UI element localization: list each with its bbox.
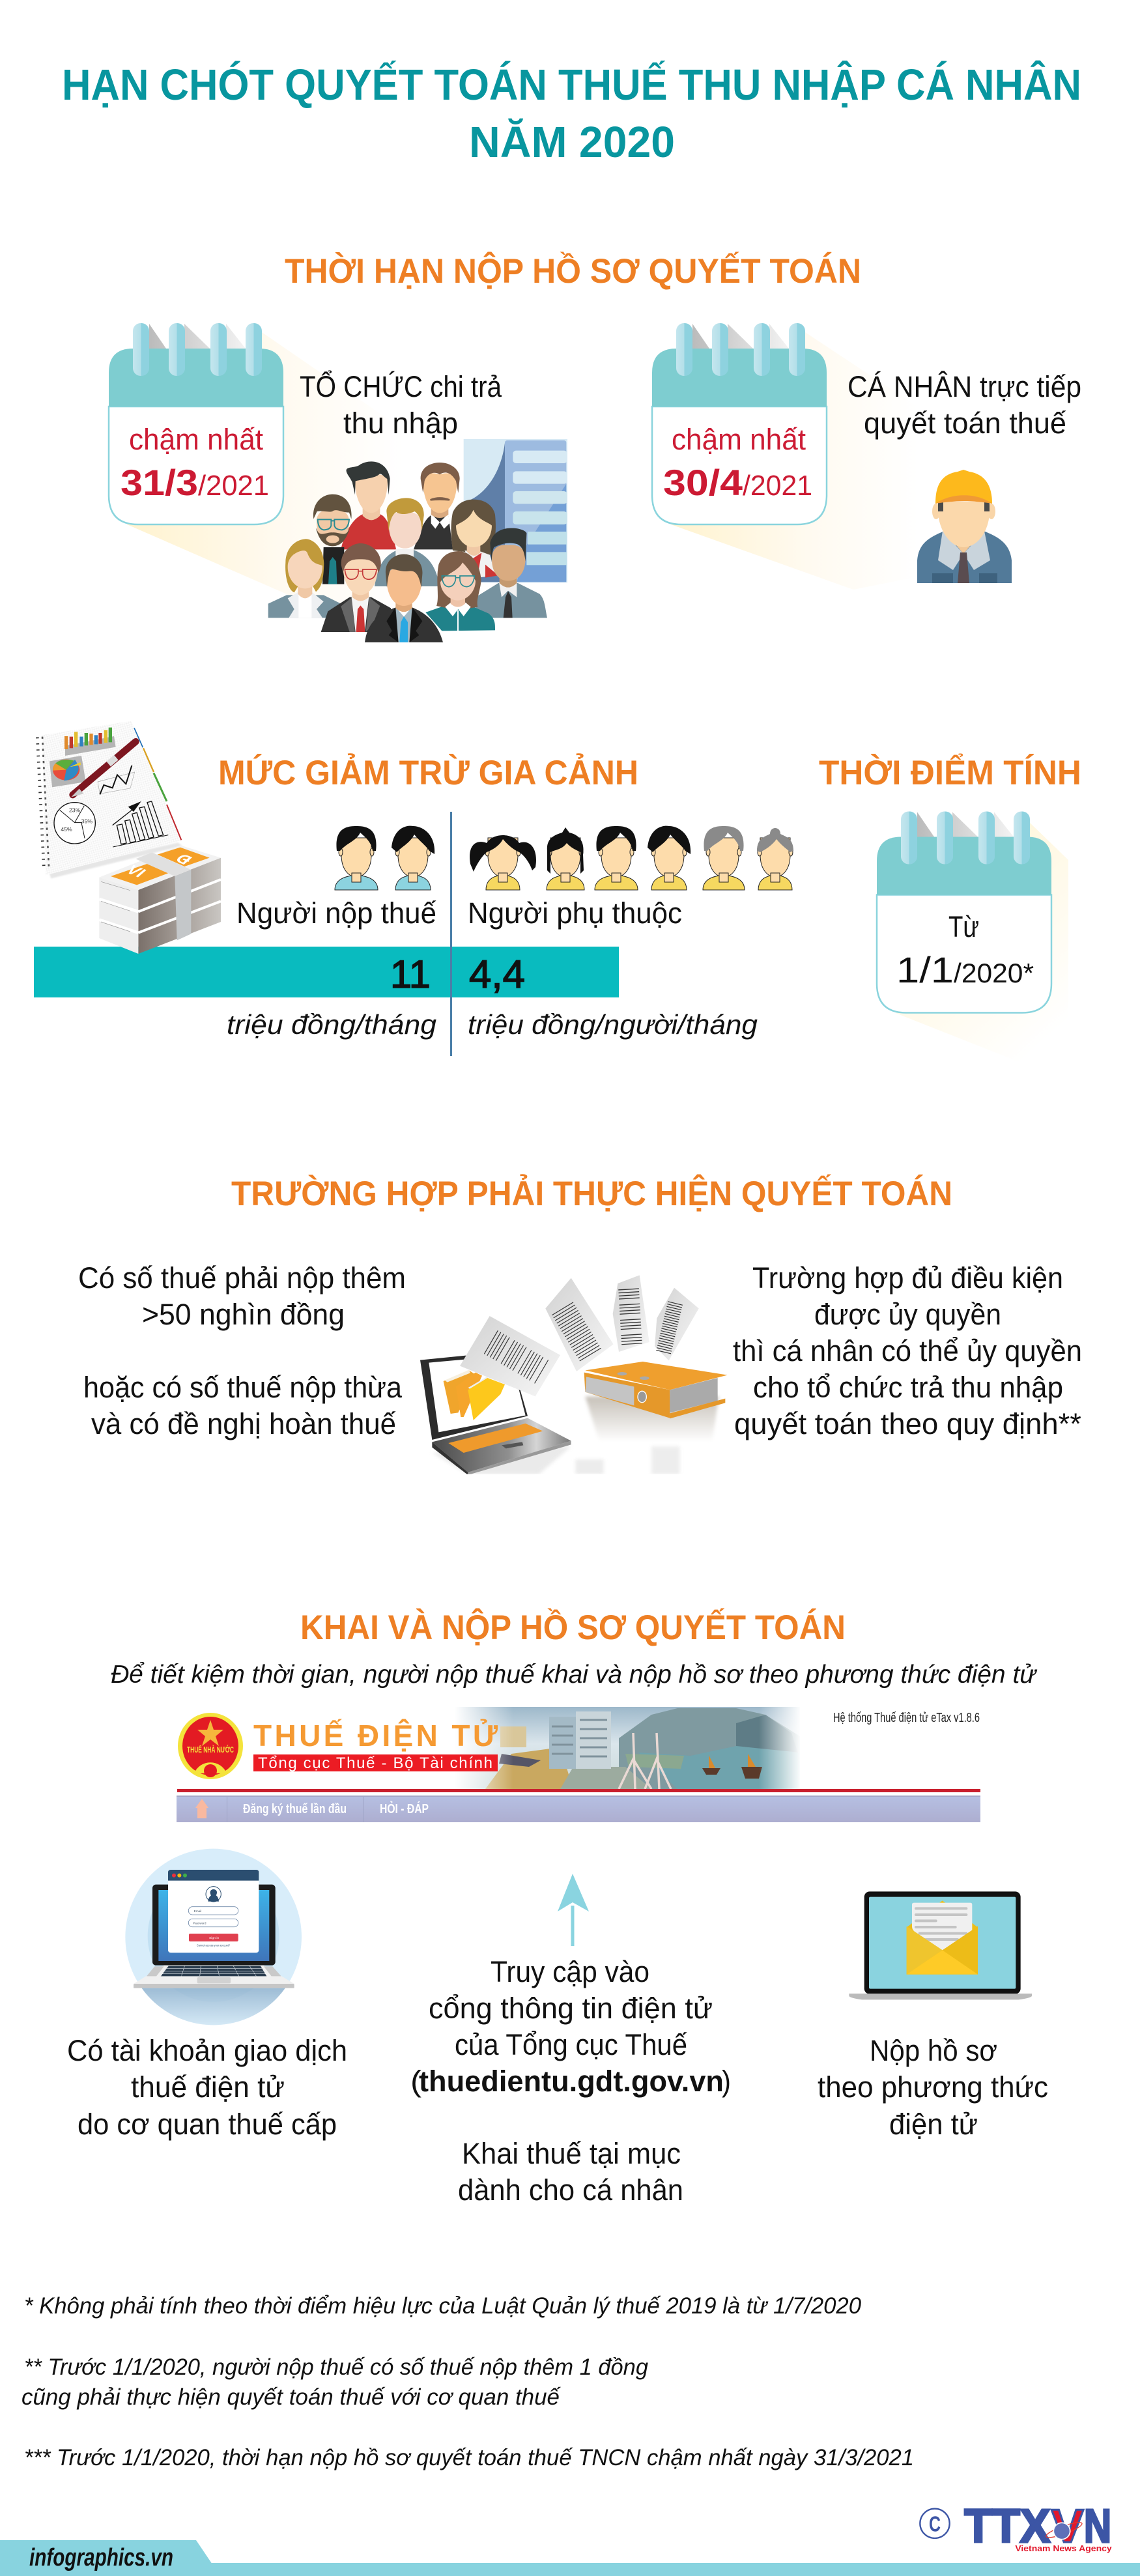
calendar: individuals deadline: chậm nhất <box>672 423 806 456</box>
text: dependent deduction: triệu đồng/người/tháng <box>468 1009 758 1040</box>
calendar: individuals deadline <box>652 323 827 524</box>
person: tan man <box>476 528 547 618</box>
subtitle: Để tiết kiệm thời gian, người nộp thuế khai và nộp hồ sơ theo phương thức điện tử <box>111 1661 1037 1689</box>
icon: laptop with envelope <box>849 1891 1032 1999</box>
text: step middle: Khai thuế tại mục <box>462 2137 681 2170</box>
calendar: effective date <box>877 812 1051 1012</box>
text: dependent deduction: 4,4 <box>469 952 525 996</box>
footnotes: * Không phải tính theo thời điểm hiệu lực của Luật Quản lý thuế 2019 là từ 1/7/2020 <box>24 2293 862 2319</box>
text block: left conditions: Có số thuế phải nộp thêm <box>78 1261 406 1295</box>
text: step right <box>818 2034 1048 2141</box>
calendar shadow: effective date <box>896 822 1068 1081</box>
icon: laptop login: Cannot access your account? <box>197 1944 230 1947</box>
text: step middle: ) <box>722 2065 731 2098</box>
calendar shadow: organisations <box>127 332 404 629</box>
person: blond woman <box>268 539 341 618</box>
illustration: notebook with charts: 23% <box>69 807 81 814</box>
red line <box>177 1789 980 1792</box>
person: moustache <box>414 463 460 549</box>
bar: deduction amounts <box>34 947 619 997</box>
logo: TTXVN: C <box>929 2512 941 2536</box>
text: step right: Nộp hồ sơ <box>870 2034 997 2067</box>
text block: right conditions: Trường hợp đủ điều kiện <box>752 1261 1063 1295</box>
footer band <box>0 2540 1140 2576</box>
illustration: notebook with charts <box>37 721 182 878</box>
illustration: notebook with charts: 45% <box>61 826 72 833</box>
calendar: effective date: 1/1 <box>896 949 954 990</box>
arrow up <box>558 1874 589 1946</box>
logo: TTXVN: TTX <box>964 2500 1050 2553</box>
text: taxpayer deduction: Người nộp thuế <box>236 896 436 930</box>
text: step middle: dành cho cá nhân <box>458 2173 683 2207</box>
text: step left: Có tài khoản giao dịch <box>67 2034 347 2067</box>
heading: thời điểm tính: THỜI ĐIỂM TÍNH <box>819 753 1081 792</box>
text: taxpayer deduction: 11 <box>390 952 431 996</box>
illustration: money stack: Đ <box>172 851 196 866</box>
calendar: organisations deadline: 31/3 <box>121 462 198 503</box>
illustration: money stack <box>99 845 221 954</box>
person: red glasses <box>321 543 391 632</box>
text: dependent deduction <box>468 896 758 1040</box>
text: individuals: CÁ NHÂN trực tiếp <box>848 370 1081 403</box>
footnotes: *** Trước 1/1/2020, thời hạn nộp hồ sơ quyết toán thuế TNCN chậm nhất ngày 31/3/2021 <box>24 2445 914 2470</box>
navigation bar <box>177 1796 980 1822</box>
text: individuals: quyết toán thuế <box>864 407 1066 440</box>
navigation bar: HỎI - ĐÁP <box>380 1801 429 1816</box>
calendar shadow: individuals <box>671 332 919 590</box>
heading: thời hạn nộp hồ sơ: THỜI HẠN NỘP HỒ SƠ QUYẾT TOÁN <box>285 251 861 291</box>
calendar: effective date: /2020* <box>954 958 1034 988</box>
red subtitle box: Tổng cục Thuế - Bộ Tài chính <box>258 1754 492 1772</box>
text: step middle <box>410 1955 731 2207</box>
text block: right conditions: cho tổ chức trả thu nhập <box>753 1371 1063 1404</box>
navigation bar: Đăng ký thuế lần đầu <box>243 1802 347 1816</box>
heading: mức giảm trừ gia cảnh: MỨC GIẢM TRỪ GIA CẢNH <box>218 753 638 792</box>
text block: right conditions <box>733 1261 1082 1440</box>
text: step middle: ( <box>410 2065 421 2098</box>
illustration: laptop, flying papers and binder <box>420 1275 728 1475</box>
calendar: organisations deadline <box>109 323 283 524</box>
text: organisations <box>300 370 502 440</box>
logo: TTXVN: N <box>1084 2500 1111 2553</box>
text: taxpayer deduction <box>227 896 436 1040</box>
icon: laptop login: Sign in <box>209 1936 219 1940</box>
text: taxpayer deduction: triệu đồng/tháng <box>227 1009 436 1040</box>
person: bearded with teal glasses <box>313 494 352 584</box>
text: step right: điện tử <box>889 2108 978 2141</box>
logo: TTXVN: V <box>1051 2500 1084 2553</box>
footer site name: infographics.vn <box>29 2544 173 2571</box>
heading: khai và nộp hồ sơ: KHAI VÀ NỘP HỒ SƠ QUYẾT TOÁN <box>300 1607 846 1647</box>
icon: laptop login: Password <box>193 1922 207 1925</box>
calendar: effective date: Từ <box>948 910 979 943</box>
text block: left conditions: hoặc có số thuế nộp thừa <box>83 1371 403 1404</box>
calendar: individuals deadline: 30/4 <box>663 462 743 503</box>
calendar: individuals deadline: /2021 <box>743 470 812 502</box>
title: HẠN CHÓT QUYẾT TOÁN THUẾ THU NHẬP CÁ NHÂN <box>62 61 1081 109</box>
calendar: organisations deadline: chậm nhất <box>129 423 263 456</box>
version text: Hệ thống Thuế điện tử eTax v1.8.6 <box>833 1711 980 1725</box>
illustration: money stack: VI <box>122 863 149 880</box>
divider line <box>450 812 452 1056</box>
text: step left: thuế điện tử <box>131 2070 285 2104</box>
icon: laptop login <box>125 1849 302 2027</box>
text block: right conditions: quyết toán theo quy định** <box>734 1407 1081 1440</box>
screenshot: website banner <box>177 1707 980 1852</box>
footnotes: ** Trước 1/1/2020, người nộp thuế có số thuế nộp thêm 1 đồng <box>24 2354 649 2380</box>
calendar: organisations deadline: /2021 <box>198 470 269 502</box>
person: long-haired woman <box>451 500 498 578</box>
text: organisations: thu nhập <box>343 407 458 440</box>
text: step right: theo phương thức <box>818 2070 1048 2104</box>
logo: TTXVN <box>920 2500 1112 2553</box>
illustration: notebook with charts: 35% <box>81 818 93 824</box>
emblem: THUẾ NHÀ NƯỚC <box>187 1745 234 1754</box>
footnotes: cũng phải thực hiện quyết toán thuế với cơ quan thuế <box>21 2384 562 2410</box>
avatars: dependents <box>470 826 793 890</box>
person: blond man <box>375 498 440 586</box>
person: red shirt <box>341 461 396 549</box>
text: step middle: Truy cập vào <box>491 1955 649 1988</box>
text: step middle: thuedientu.gdt.gov.vn <box>419 2065 724 2098</box>
title <box>62 61 1081 167</box>
text block: right conditions: thì cá nhân có thể ủy quyền <box>733 1334 1082 1367</box>
text: organisations: TỔ CHỨC chi trả <box>300 370 502 403</box>
title: NĂM 2020 <box>469 118 675 167</box>
text block: right conditions: được ủy quyền <box>814 1298 1001 1331</box>
text block: left conditions <box>78 1261 406 1440</box>
avatars: taxpayers <box>335 826 435 890</box>
illustration: building and group of people <box>268 439 567 642</box>
text block: left conditions: >50 nghìn đồng <box>142 1298 345 1331</box>
text block: left conditions: và có đề nghị hoàn thuế <box>91 1407 396 1440</box>
icon: worker with helmet <box>917 470 1012 583</box>
icon: laptop login: Email <box>194 1910 201 1913</box>
text: step middle: cổng thông tin điện tử <box>429 1992 713 2025</box>
emblem <box>178 1713 243 1779</box>
text: step middle: của Tổng cục Thuế <box>455 2028 687 2061</box>
text: individuals <box>848 370 1081 440</box>
person: teal top woman <box>425 551 495 631</box>
footnotes <box>21 2293 914 2470</box>
heading: trường hợp quyết toán: TRƯỜNG HỢP PHẢI THỰC HIỆN QUYẾT TOÁN <box>231 1173 952 1213</box>
text: step left: do cơ quan thuế cấp <box>78 2108 337 2141</box>
landscape <box>455 1707 801 1789</box>
logo: TTXVN: Vietnam News Agency <box>1015 2543 1112 2553</box>
person: front man with blue tie <box>365 554 443 642</box>
banner name: THUẾ ĐIỆN TỬ <box>253 1719 498 1753</box>
text: dependent deduction: Người phụ thuộc <box>468 896 682 930</box>
text: step left <box>67 2034 347 2141</box>
